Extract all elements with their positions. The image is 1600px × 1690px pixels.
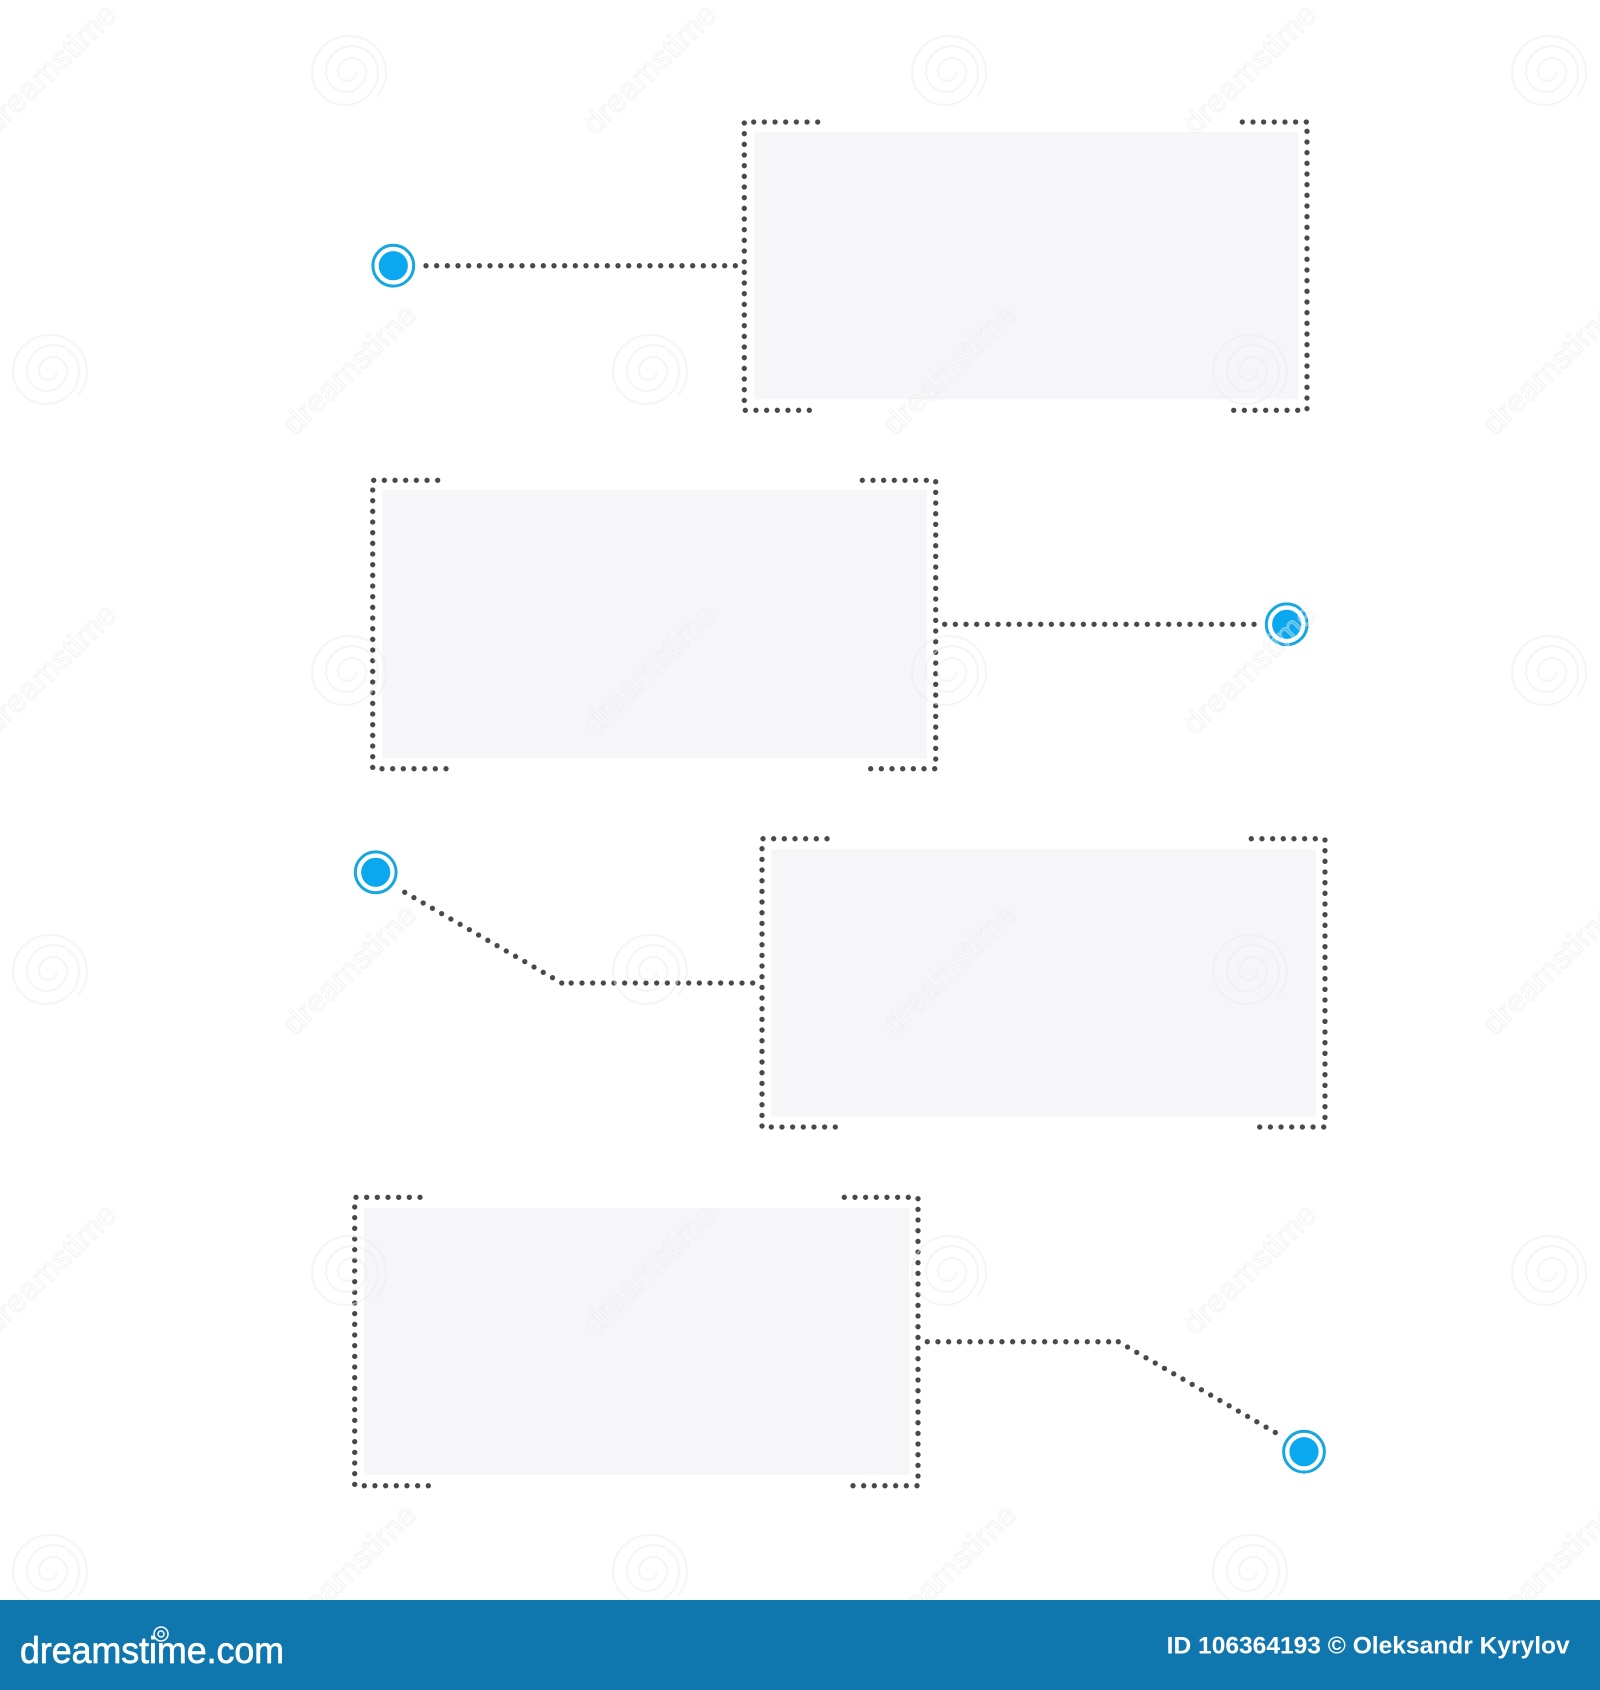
footer bar: [0, 1600, 1600, 1690]
panel: box 1: [744, 122, 1307, 410]
dotted frame 3: [762, 839, 1325, 1127]
footer credit: ID 106364193 © Oleksandr Kyrylov: [1167, 1632, 1570, 1659]
dotted frame 2: [373, 480, 936, 769]
watermark text: dreamstime: [1176, 596, 1324, 741]
watermark text: dreamstime: [576, 1196, 724, 1341]
watermark text: dreamstime: [1176, 1196, 1324, 1341]
panel: box 3: [762, 839, 1325, 1127]
icon: blue marker 2: [1266, 604, 1307, 645]
watermark text: dreamstime: [576, 0, 724, 141]
panel: box 4: [355, 1197, 918, 1486]
watermark text: dreamstime: [576, 596, 724, 741]
panel fill 3: [771, 849, 1316, 1117]
connector 4 with marker: [927, 1342, 1324, 1472]
watermark text: dreamstime: [276, 896, 424, 1041]
dotted line 2: [945, 622, 1254, 627]
icon: blue marker 3: [355, 852, 396, 893]
dotted frame 1: [744, 122, 1307, 410]
watermark text: dreamstime: [876, 1496, 1024, 1641]
panel fill 2: [382, 490, 927, 758]
panel fill 4: [364, 1208, 909, 1475]
panel fill 1: [754, 132, 1298, 399]
icon: logo spiral: [154, 1627, 168, 1641]
connector 1 with marker: [373, 245, 735, 286]
connector 2 with marker: [945, 604, 1307, 645]
panel: box 2: [373, 480, 936, 769]
icon: blue marker 4: [1284, 1431, 1324, 1472]
connector 3 with marker: [355, 852, 753, 986]
watermark text: dreamstime: [876, 896, 1024, 1041]
dotted line 1: [426, 263, 735, 268]
dotted elbow line 4: [927, 1342, 1275, 1432]
watermark text: dreamstime: [276, 1496, 424, 1641]
watermark text: dreamstime: [876, 296, 1024, 441]
watermark text: dreamstime: [1176, 0, 1324, 141]
watermark text: dreamstime: [276, 296, 424, 441]
footer logo text: dreamstime.com: [20, 1630, 284, 1671]
dotted frame 4: [355, 1197, 918, 1486]
dotted elbow line 3: [405, 892, 753, 986]
icon: blue marker 1: [373, 245, 414, 286]
